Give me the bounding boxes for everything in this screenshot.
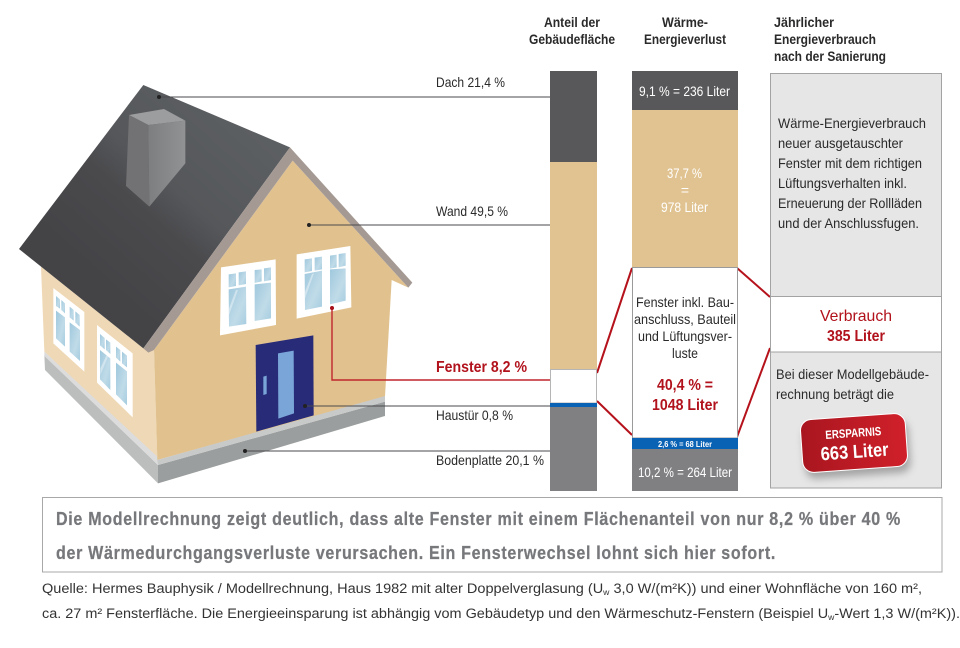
label: Wand: Wand 49,5 %	[436, 203, 508, 219]
front door	[256, 335, 314, 432]
segment: Fenster: anschluss, Bauteil	[634, 311, 736, 327]
heading: Wärme-Energieverlust	[644, 14, 726, 47]
heading: Jährlicher Energieverbrauch	[774, 14, 886, 64]
plinth light strip side	[44, 352, 158, 465]
text: description: und der Anschlussfugen.	[778, 215, 919, 231]
roof	[19, 85, 290, 348]
segment: Wand: 37,7 %	[667, 165, 702, 181]
source note: w	[602, 588, 610, 597]
heading: Wärme-Energieverlust: Wärme-	[662, 14, 708, 30]
label: Bodenplatte: Bodenplatte 20,1 %	[436, 452, 544, 468]
label: Haustür: Haustür 0,8 %	[436, 407, 513, 423]
stacked bar: Gebäudefläche	[550, 71, 597, 491]
text: savings intro	[776, 366, 929, 402]
segment: Haustür: 2,6 % = 68 Liter	[658, 440, 712, 449]
text: description: Erneuerung der Rollläden	[778, 195, 922, 211]
label: Dach: Dach 21,4 %	[436, 74, 505, 90]
text: savings intro: rechnung beträgt die	[776, 386, 894, 402]
segment: Wand	[632, 110, 738, 268]
segment: Bodenplatte: 10,2 % = 264 Liter	[638, 464, 732, 480]
callout: Verbrauch 385 Liter: 385 Liter	[827, 328, 885, 345]
heading: Wärme-Energieverlust: Energieverlust	[644, 31, 726, 47]
plinth left side	[44, 355, 158, 483]
source note: w	[827, 613, 835, 622]
gable trim	[143, 147, 412, 353]
window: upper left front	[220, 259, 276, 335]
badge: Ersparnis 663 Liter: 663 Liter	[820, 440, 890, 465]
house illustration	[19, 85, 412, 483]
connector lines: zoom to loss column	[597, 268, 770, 437]
window: side right	[97, 325, 133, 417]
segment: Fenster: luste	[672, 345, 698, 361]
source note: -Wert 1,3 W/(m²K)).	[834, 606, 960, 621]
heading: Jährlicher Energieverbrauch: nach der Sanierung	[774, 48, 886, 64]
source note: Quelle: Hermes Bauphysik / Modellrechnung, Haus 1982 mit alter Doppelverglasung (U	[42, 581, 560, 596]
leader line: Fenster	[330, 306, 550, 380]
text: savings intro: Bei dieser Modellgebäude-	[776, 366, 929, 382]
heading: Anteil der Gebäudefläche: Gebäudefläche	[529, 31, 615, 47]
chimney	[126, 109, 185, 207]
text: description: Fenster mit dem richtigen	[778, 155, 922, 171]
segment: Fenster	[632, 268, 738, 438]
leader line: Bodenplatte	[243, 449, 550, 453]
plinth front side	[158, 402, 385, 483]
leader line: Dach	[157, 95, 550, 99]
badge: Ersparnis 663 Liter: ERSPARNIS	[825, 424, 882, 442]
panel: Energieverbrauch nach Sanierung	[770, 74, 942, 488]
text: description: Lüftungsverhalten inkl.	[778, 175, 907, 191]
source note: ca. 27 m² Fensterfläche. Die Energieeinsparung ist abhängig vom Gebäudetyp und den Wärmeschutz-Fenstern (Beispiel U	[42, 606, 771, 621]
heading: Anteil der Gebäudefläche: Anteil der	[544, 14, 600, 30]
source note: 3,0 W/(m²K)) und einer Wohnfläche von 160 m²,	[609, 581, 922, 596]
segment: Wand: =	[681, 182, 689, 198]
segment: Bodenplatte	[632, 449, 738, 491]
segment: Fenster: Fenster inkl. Bau-	[636, 294, 734, 310]
badge: Ersparnis 663 Liter	[800, 413, 911, 480]
stacked bar: Wärme-Energieverlust	[632, 71, 738, 491]
side wall	[41, 267, 157, 458]
text: description	[778, 115, 926, 231]
segment: Fenster: und Lüftungsver-	[638, 328, 732, 344]
text: description: Wärme-Energieverbrauch	[778, 115, 926, 131]
conclusion box	[42, 498, 942, 572]
heading: Jährlicher Energieverbrauch: Jährlicher	[774, 14, 834, 30]
segment: Dach: 9,1 % = 236 Liter	[639, 83, 730, 99]
callout: Verbrauch 385 Liter	[770, 296, 942, 352]
segment: Dach	[632, 71, 738, 110]
heading: Jährlicher Energieverbrauch: Energieverbrauch	[774, 31, 876, 47]
callout: Verbrauch 385 Liter: Verbrauch	[820, 308, 892, 325]
source note	[42, 581, 960, 622]
plinth light strip front	[157, 396, 385, 465]
heading: Anteil der Gebäudefläche	[529, 14, 615, 47]
text: description: neuer ausgetauschter	[778, 135, 903, 151]
conclusion box: der Wärmedurchgangsverluste verursachen. Ein Fensterwechsel lohnt sich hier sofort.	[56, 542, 776, 563]
leader line: Wand	[307, 223, 550, 227]
front wall	[154, 161, 408, 460]
segment: Wand: 978 Liter	[661, 199, 708, 215]
window: upper right front	[297, 246, 351, 319]
window: side left	[53, 288, 84, 372]
segment: Fenster: 40,4 % =	[657, 377, 713, 394]
segment: Fenster: 1048 Liter	[652, 397, 718, 414]
segment: Haustür	[632, 438, 738, 449]
leader line: Haustür	[303, 404, 550, 408]
label: Fenster: Fenster 8,2 %	[436, 359, 527, 376]
